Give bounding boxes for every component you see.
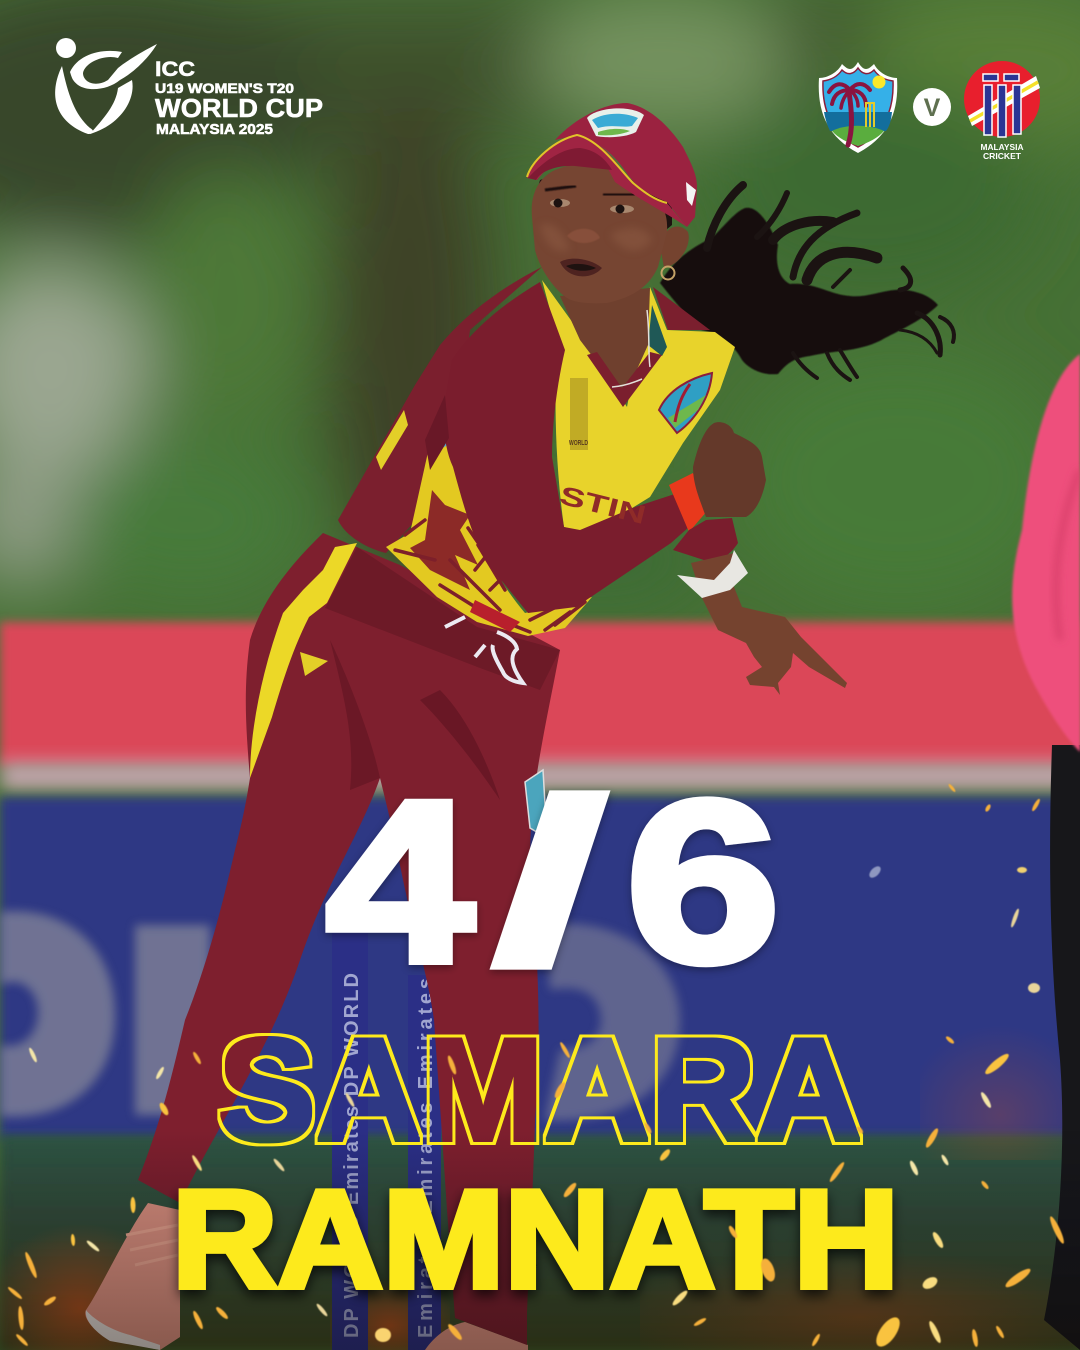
jersey wording: STIN [557,480,649,530]
blurred board lettering [0,911,680,1120]
back of torso [338,267,542,553]
logo wording: WORLD CUP [155,93,323,123]
Malaysia Cricket logo: MALAYSIA [980,142,1024,152]
player first name: SAMARA (outlined): SAMARA [218,1008,862,1171]
tournament logo: ICC U19 Women's T20 World Cup Malaysia 2025 [55,38,323,138]
hand band [669,473,708,532]
jersey event logo: WORLD [569,440,588,447]
face [532,164,667,303]
trouser stripe [250,543,357,778]
logo wording [155,58,323,138]
versus badge: V [924,94,941,122]
player surname: RAMNATH: RAMNATH [172,1162,899,1317]
brows, eyes, nose and mouth [545,186,635,276]
versus badge [913,88,951,126]
West Indies crest [819,62,897,153]
logo wording: U19 WOMEN'S T20 [155,80,294,96]
watch [677,550,748,598]
hair under cap [533,160,672,235]
umpire at right edge [1012,354,1080,1350]
jersey crest [659,373,712,433]
forearm and hand [691,553,847,695]
earring [662,266,674,280]
darkening over the bottom of the photo [0,1130,1080,1350]
stumps with sponsor lettering [332,932,441,1350]
bowling sleeve [444,282,689,613]
knee patch logo [525,770,547,838]
drawstring [445,617,523,683]
neck [560,288,650,398]
Malaysia Cricket logo: CRICKET [983,151,1022,161]
yellow front of jersey [542,280,735,534]
stumps with sponsor lettering: Emirates Emirates Emirates [415,978,437,1338]
cheek highlight [540,224,652,251]
maroon collar yoke [653,287,710,330]
back foot shoe [85,1203,180,1350]
logo wording: MALAYSIA 2025 [156,122,273,138]
necklace [612,310,650,387]
fire sparks [7,783,1066,1350]
Malaysia Cricket logo [964,61,1040,161]
player: Samara Ramnath bowling [85,103,954,1350]
logo mark [55,38,157,134]
lower jersey pattern [386,437,592,636]
other sleeve cuff [673,518,738,562]
jersey event logo [569,378,588,450]
bowling figures: 4/6: 6 [626,753,780,1010]
trousers [138,533,560,1345]
cap [527,103,697,227]
stumps with sponsor lettering: DP WORLD Emirates DP WORLD [341,973,363,1338]
bowling figures: 4/6 [326,753,780,1010]
trouser logo [300,652,328,676]
bowling figures: 4/6: / [494,753,606,1010]
front shoe [425,1322,528,1350]
hair [660,185,954,380]
fist [693,422,766,517]
bowling figures: 4/6: 4 [326,753,474,1010]
ear [660,226,689,268]
logo wording: ICC [155,58,195,81]
